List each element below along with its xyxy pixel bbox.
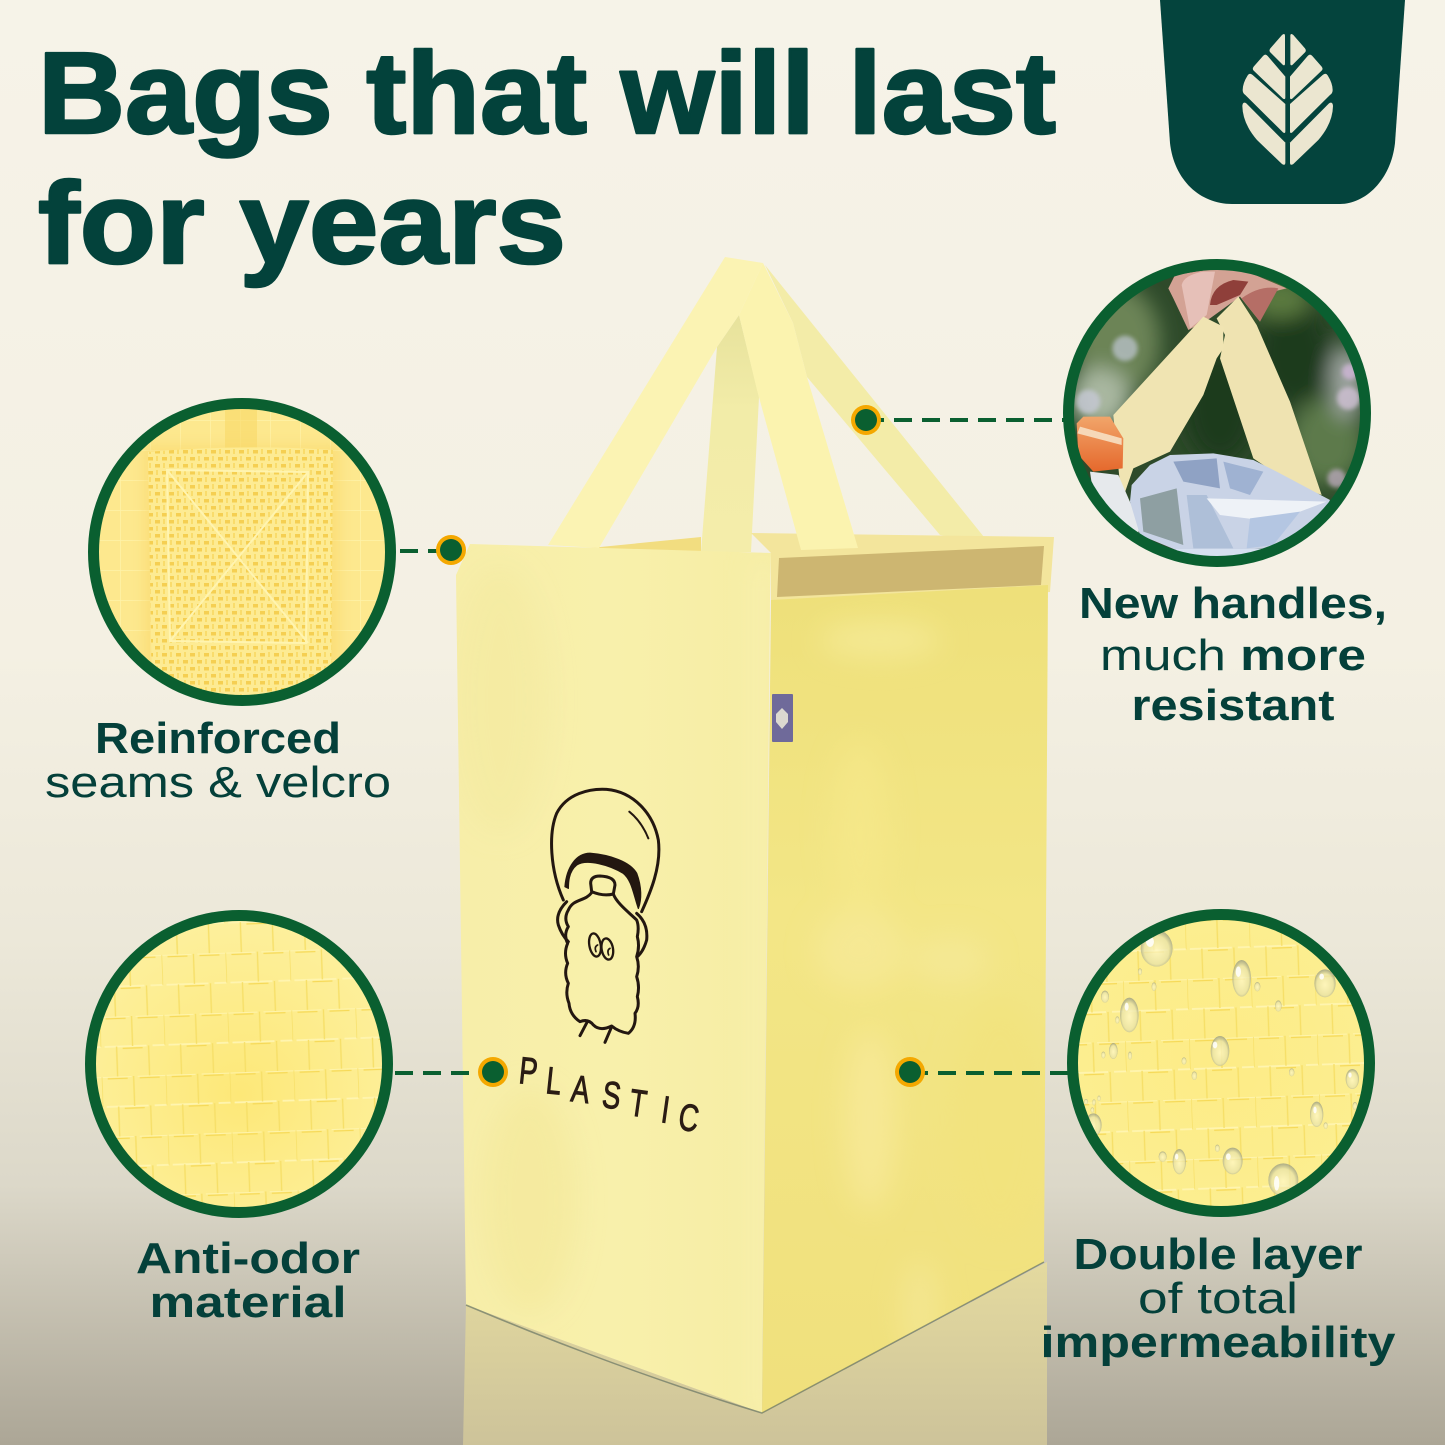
photo: handles in hand (1074, 270, 1360, 556)
caption: Double layer (1074, 1230, 1362, 1279)
bag print: PLASTIC: C (676, 1096, 702, 1141)
reflection under bag (463, 1262, 1047, 1445)
bag interior rim (590, 533, 1054, 605)
front handle (548, 257, 858, 550)
label tag (772, 694, 793, 742)
panel: anti-odor (88, 912, 508, 1327)
caption: of total (1138, 1274, 1298, 1323)
side panel (762, 585, 1050, 1413)
bag print: PLASTIC: L (544, 1060, 564, 1104)
bag print: PLASTIC: I (659, 1089, 672, 1132)
bag print: PLASTIC: P (517, 1050, 540, 1094)
logo badge with leaf (1160, 0, 1405, 204)
photo: water droplets (1078, 920, 1364, 1206)
bag print: PLASTIC: T (627, 1082, 649, 1126)
caption: Reinforced (95, 714, 341, 763)
connector (851, 405, 1066, 435)
icon: leaf (1242, 34, 1333, 165)
bag (455, 257, 1054, 1420)
caption: Anti-odor (136, 1234, 360, 1283)
caption (136, 1234, 360, 1327)
title: for years (38, 158, 566, 288)
back handle (701, 265, 988, 552)
panel: new handles (851, 255, 1387, 730)
bag print: PLASTIC (517, 1050, 702, 1141)
connector (895, 1057, 1070, 1087)
bag bottom edge shadow (466, 1262, 1044, 1413)
bag print: PLASTIC: A (569, 1068, 593, 1112)
panel: double layer (895, 912, 1396, 1367)
title: Bags that will last (38, 28, 1056, 158)
caption (45, 714, 391, 807)
caption (1079, 579, 1387, 730)
caption: impermeability (1040, 1318, 1396, 1367)
caption: much more (1100, 631, 1366, 680)
connector (400, 535, 466, 565)
caption: resistant (1132, 681, 1335, 730)
caption (1040, 1230, 1396, 1367)
icon: bottle in bag drawing (552, 789, 659, 1042)
caption: New handles, (1079, 579, 1387, 628)
panel: reinforced seams (45, 400, 466, 807)
caption: material (150, 1278, 346, 1327)
caption: seams & velcro (45, 758, 391, 807)
photo: woven texture (96, 921, 382, 1207)
connector (395, 1057, 508, 1087)
front panel (455, 544, 771, 1420)
title (38, 28, 1056, 288)
bag print: PLASTIC: S (600, 1074, 623, 1118)
photo: stitched seam (99, 409, 385, 695)
